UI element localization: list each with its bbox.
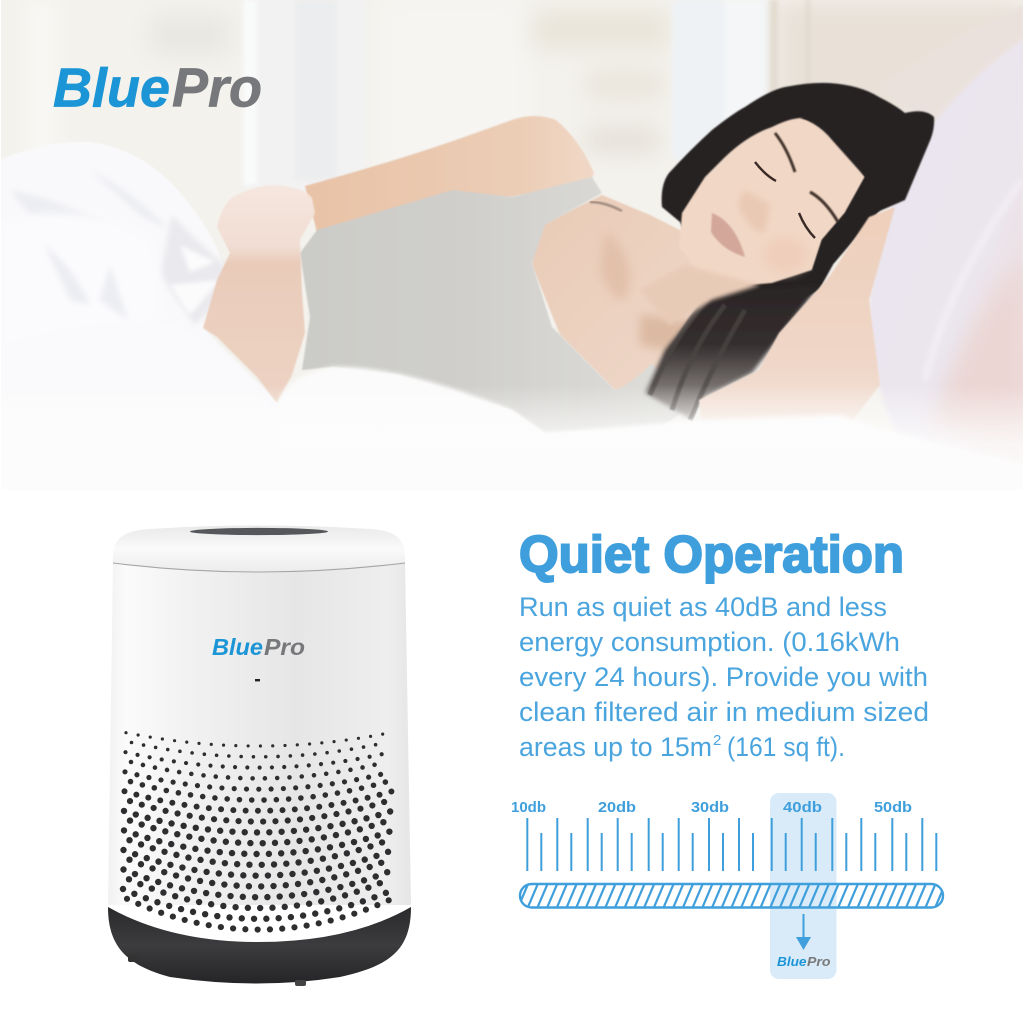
body text: areas up to 15m [519, 732, 712, 762]
body text: Run as quiet as 40dB and less [519, 592, 887, 622]
window frames [243, 0, 810, 190]
purifier body [108, 560, 411, 905]
eyes and brows [755, 162, 815, 238]
scale labels: 20db [598, 800, 636, 816]
lower hair, fading strands [645, 285, 820, 418]
device logo [212, 634, 305, 660]
bottom fade [273, 388, 1023, 490]
body text [519, 592, 929, 762]
neck [640, 265, 760, 325]
foot right [295, 980, 306, 986]
scale labels: 30db [691, 800, 729, 816]
face [640, 118, 865, 325]
heading: Quiet Operation: Quiet Operation [519, 526, 904, 584]
scale labels [511, 800, 912, 816]
device logo: Blue [212, 634, 263, 660]
body text: every 24 hours). Provide you with [519, 662, 928, 692]
lips [711, 213, 745, 257]
small BluePro logo [777, 955, 831, 969]
white bedding [276, 365, 852, 430]
small BluePro logo: Pro [807, 955, 831, 969]
body text: 2 [713, 732, 721, 749]
window background, blurred [156, 0, 1019, 157]
upper arm behind head [305, 116, 594, 236]
dark base [108, 907, 411, 984]
hatched level bar [520, 884, 943, 908]
40db highlight band [770, 793, 836, 979]
front arm under head [699, 207, 895, 430]
lid seam [113, 563, 405, 572]
hair [645, 83, 934, 420]
logo: BluePro [53, 56, 262, 118]
top air outlet [190, 528, 328, 535]
foot left [128, 955, 138, 962]
scale labels: 10db [511, 800, 546, 816]
tank top [300, 177, 685, 433]
scale labels: 40db [783, 800, 822, 816]
nose [739, 190, 770, 232]
body text: clean filtered air in medium sized [519, 697, 929, 727]
scale labels: 50db [874, 800, 912, 816]
air purifier product [108, 526, 411, 986]
body text: energy consumption. (0.16kWh [519, 627, 900, 657]
body text: (161 sq ft). [727, 732, 845, 762]
small BluePro logo: Blue [777, 955, 807, 969]
perforated grille [123, 733, 395, 930]
indicator light [255, 679, 260, 681]
device logo: Pro [264, 634, 305, 660]
noise level scale chart [511, 793, 943, 979]
forearm and hand [203, 185, 315, 403]
left sheets [1, 142, 276, 406]
skin: chest and neck [532, 194, 705, 397]
photo: woman sleeping in bed [0, 0, 1024, 490]
arrow down [796, 914, 811, 950]
logo: BluePro: Pro [172, 56, 262, 118]
purifier lid [113, 526, 405, 572]
pillow [870, 10, 1023, 436]
cheek [770, 244, 806, 280]
logo: BluePro: Blue [53, 56, 170, 118]
hair fringe [800, 117, 881, 270]
tick marks [527, 818, 936, 871]
